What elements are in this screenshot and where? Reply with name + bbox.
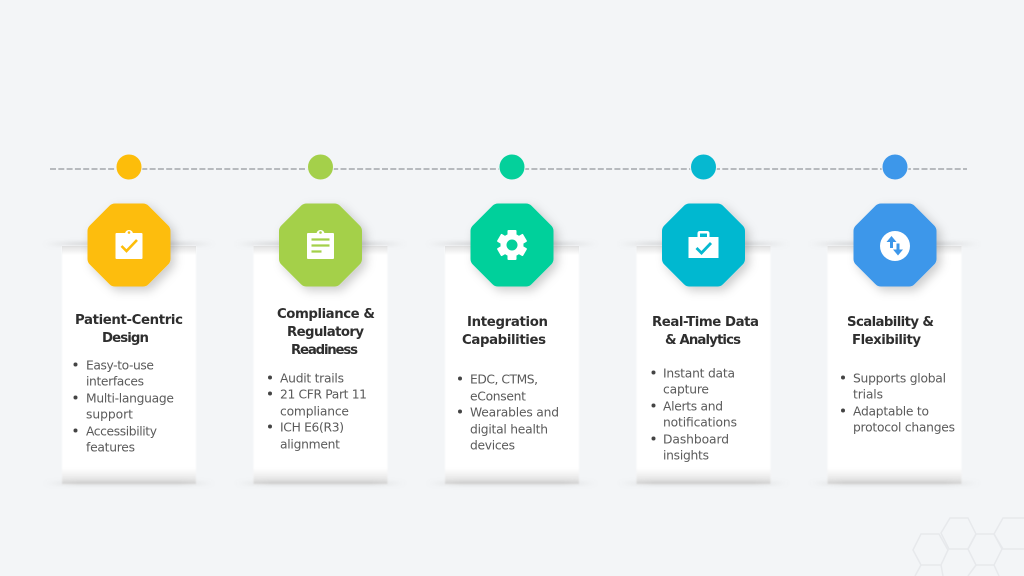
bullet list [652,366,737,462]
bullet list: insights [663,448,709,462]
bullet list: 21 CFR Part 11 [280,388,367,402]
bullet list: Alerts and [663,400,723,414]
icon: up and down arrows [854,204,936,286]
timeline dot 2 [308,154,334,180]
heading: Patient-Centric [75,313,183,328]
heading: Regulatory [287,325,364,340]
heading: Compliance & [277,307,375,322]
bullet list [841,372,955,434]
bullet list: Easy-to-use [86,358,154,372]
bullet list: Supports global [853,372,946,386]
decorative hexagon pattern [913,518,1024,576]
bullet list: Dashboard [663,432,729,446]
heading: Flexibility [852,333,921,348]
bullet list [268,372,367,452]
bullet list: ICH E6(R3) [280,420,344,434]
bullet list: devices [470,438,515,452]
icon: clipboard list [279,204,362,286]
bullet list [458,372,559,452]
bullet list: support [86,408,133,422]
heading: Integration [467,315,548,330]
timeline dashed line [50,168,967,170]
heading: Readiness [291,343,358,358]
heading: Scalability & [847,315,934,330]
bullet list [74,358,174,454]
bullet list: interfaces [86,374,144,388]
bullet list: digital health [470,422,548,436]
timeline dot 3 [499,154,525,180]
heading: Capabilities [462,333,546,348]
timeline dot 1 [116,154,142,180]
panel: Patient-Centric Design [44,204,214,484]
bullet list: EDC, CTMS, [470,372,538,386]
bullet list: eConsent [470,390,526,404]
panel: Scalability & Flexibility [810,204,980,484]
heading [652,315,759,348]
bullet list: capture [663,382,709,396]
heading: Design [102,331,149,346]
icon: briefcase check [662,204,745,286]
icon: clipboard check [88,204,170,286]
bullet list: Audit trails [280,372,344,386]
heading [75,313,183,346]
heading: & Analytics [665,333,741,348]
bullet list: Accessibility [86,424,157,438]
timeline dot 5 [882,154,908,180]
bullet list: compliance [280,404,349,418]
heading: Real-Time Data [652,315,759,330]
bullet list: protocol changes [853,420,955,434]
heading [277,307,375,358]
timeline dot 4 [690,154,716,180]
bullet list: notifications [663,416,737,430]
bullet list: Adaptable to [853,404,929,418]
icon: gear [470,204,554,286]
bullet list: trials [853,388,883,402]
bullet list: alignment [280,438,340,452]
heading [847,315,934,348]
bullet list: features [86,440,135,454]
panel: Real-Time Data & Analytics [618,204,788,484]
bullet list: Wearables and [470,406,559,420]
panel: Integration Capabilities [427,204,597,484]
bullet list: Multi-language [86,392,174,406]
heading [462,315,548,348]
bullet list: Instant data [663,366,735,380]
panel: Compliance & Regulatory Readiness [236,204,406,484]
